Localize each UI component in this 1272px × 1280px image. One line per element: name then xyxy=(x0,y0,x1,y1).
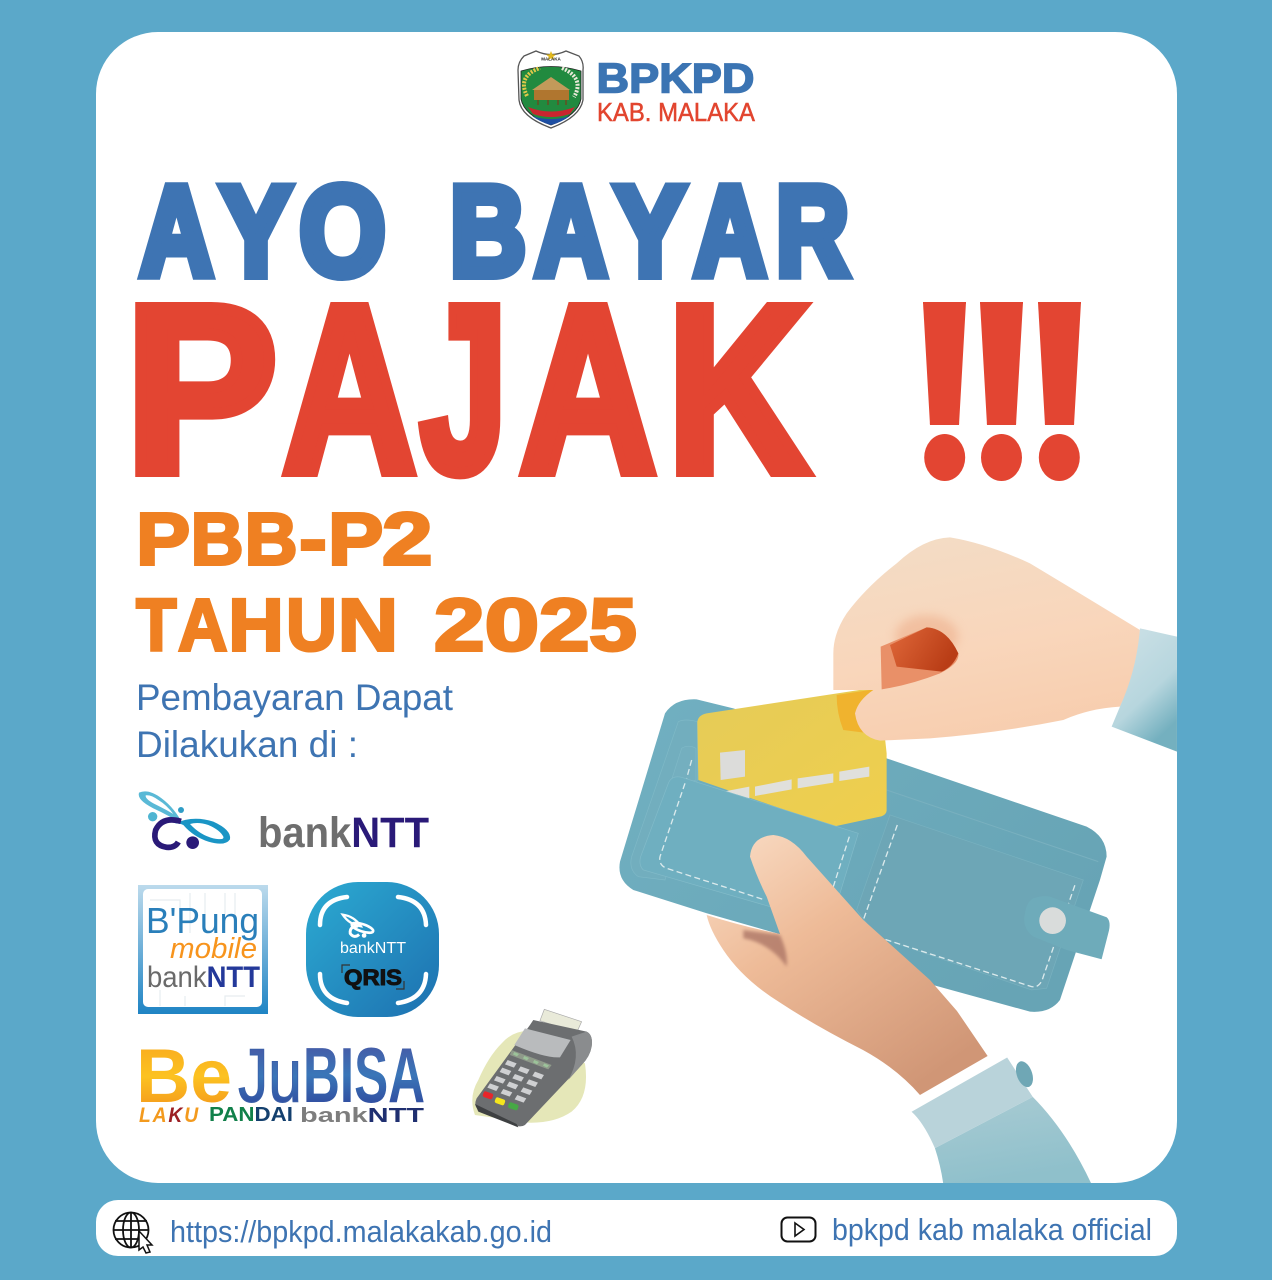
title: AYO BAYAR: Y xyxy=(220,160,292,302)
logo: bank NTT xyxy=(139,791,429,857)
heading: Tahun 2025: H xyxy=(228,584,284,666)
logo: BeJuBISA Laku Pandai xyxy=(136,1031,425,1127)
title: AYO BAYAR: R xyxy=(776,160,849,302)
heading: Tahun 2025: A xyxy=(178,584,228,666)
icon: globe with cursor xyxy=(114,1212,152,1253)
heading: PBB-P2 xyxy=(136,498,432,580)
icon: Malaka regency emblem: MALAKA xyxy=(541,56,561,62)
exclamation marks xyxy=(923,302,1081,481)
wallet right pocket xyxy=(857,815,1083,990)
subheading: Kab. Malaka: KAB. MALAKA xyxy=(597,97,756,127)
text block: payment intro: Dilakukan di : xyxy=(136,724,358,765)
lower hand xyxy=(707,835,988,1095)
wallet and lower hand xyxy=(619,688,1110,1095)
text: mobile: mobile xyxy=(170,933,257,965)
text: bankNTT: bankNTT xyxy=(340,940,406,957)
title: AYO BAYAR: A xyxy=(140,160,213,302)
heading: PBB-P2: P xyxy=(328,498,383,580)
heading: Tahun 2025 xyxy=(136,584,637,666)
panel: main white card xyxy=(96,32,1177,1183)
title: AYO BAYAR: A xyxy=(535,160,607,302)
text: B'Pung: B'Pung xyxy=(146,900,259,941)
credit card xyxy=(697,688,887,827)
heading: Tahun 2025: 2 xyxy=(434,584,484,666)
text block: payment intro xyxy=(136,677,454,765)
title: PAJAK !!!: P xyxy=(126,257,277,522)
exclamation marks: ! xyxy=(888,247,1002,533)
wallet front pocket xyxy=(640,777,858,907)
text: PANDAI: PANDAI xyxy=(209,1104,293,1126)
wallet top stitching xyxy=(687,760,692,778)
exclamation marks: ! xyxy=(1003,247,1117,533)
heading: Tahun 2025: N xyxy=(338,584,398,666)
heading: PBB-P2: - xyxy=(299,498,327,580)
heading: Tahun 2025: 5 xyxy=(589,584,637,666)
exclamation marks: ! xyxy=(945,247,1059,533)
logo: B'Pung mobile xyxy=(138,885,268,1014)
gap between fingers xyxy=(881,627,958,689)
title: PAJAK !!!: K xyxy=(668,257,808,522)
title: AYO BAYAR: B xyxy=(450,160,526,302)
text: channel name: bpkpd kab malaka official xyxy=(832,1212,1152,1247)
text: bankNTT: bank NTT xyxy=(300,1105,424,1127)
wallet back body xyxy=(619,699,1107,1012)
logo: bank NTT QRIS app xyxy=(306,882,439,1017)
icon: white dragonfly xyxy=(343,915,374,938)
text: QRIS: QRIS xyxy=(344,965,402,990)
title: AYO BAYAR xyxy=(140,160,849,302)
text: website url: https://bpkpd.malakakab.go.id xyxy=(170,1214,552,1249)
wallet strap and button xyxy=(1039,903,1110,960)
icon: EDC payment terminal xyxy=(472,1009,592,1127)
icon: video play xyxy=(782,1218,816,1242)
heading: PBB-P2: P xyxy=(136,498,190,580)
text: LAKU: LAKU xyxy=(139,1104,200,1127)
text: Ju: Ju xyxy=(238,1034,302,1119)
title: PAJAK !!!: J xyxy=(420,257,507,522)
illustration: hands taking a card from a wallet xyxy=(619,537,1177,1183)
lower sleeve and cuff xyxy=(912,1058,1091,1183)
heading: Tahun 2025: 2 xyxy=(539,584,590,666)
icon: Malaka regency emblem xyxy=(518,51,583,128)
title: AYO BAYAR: O xyxy=(300,160,386,302)
heading: Tahun 2025: U xyxy=(286,584,337,666)
title: AYO BAYAR: A xyxy=(694,160,766,302)
title: AYO BAYAR: Y xyxy=(614,160,686,302)
title: PAJAK !!! xyxy=(126,247,1117,533)
text: BISA: BISA xyxy=(303,1031,425,1119)
text: bankNTT: bankNTT xyxy=(147,961,260,994)
heading: BPKPD: BPKPD xyxy=(596,54,754,102)
icon: bank NTT dragonfly xyxy=(139,791,230,849)
heading: PBB-P2: B xyxy=(245,498,298,580)
heading: PBB-P2: 2 xyxy=(382,498,432,580)
heading: Tahun 2025: 0 xyxy=(485,584,539,666)
upper sleeve xyxy=(1112,628,1177,752)
header logo: BPKPD Kab. Malaka xyxy=(518,51,756,128)
wordmark: bankNTT: bankNTT xyxy=(258,809,429,857)
panel: footer bar xyxy=(96,1200,1177,1256)
heading: PBB-P2: B xyxy=(191,498,244,580)
title: PAJAK !!!: A xyxy=(520,257,656,522)
text block: payment intro: Pembayaran Dapat xyxy=(136,677,454,718)
title: PAJAK !!!: A xyxy=(283,257,416,522)
heading: Tahun 2025: T xyxy=(136,584,176,666)
upper hand xyxy=(833,537,1177,752)
text: Be: Be xyxy=(136,1034,232,1119)
